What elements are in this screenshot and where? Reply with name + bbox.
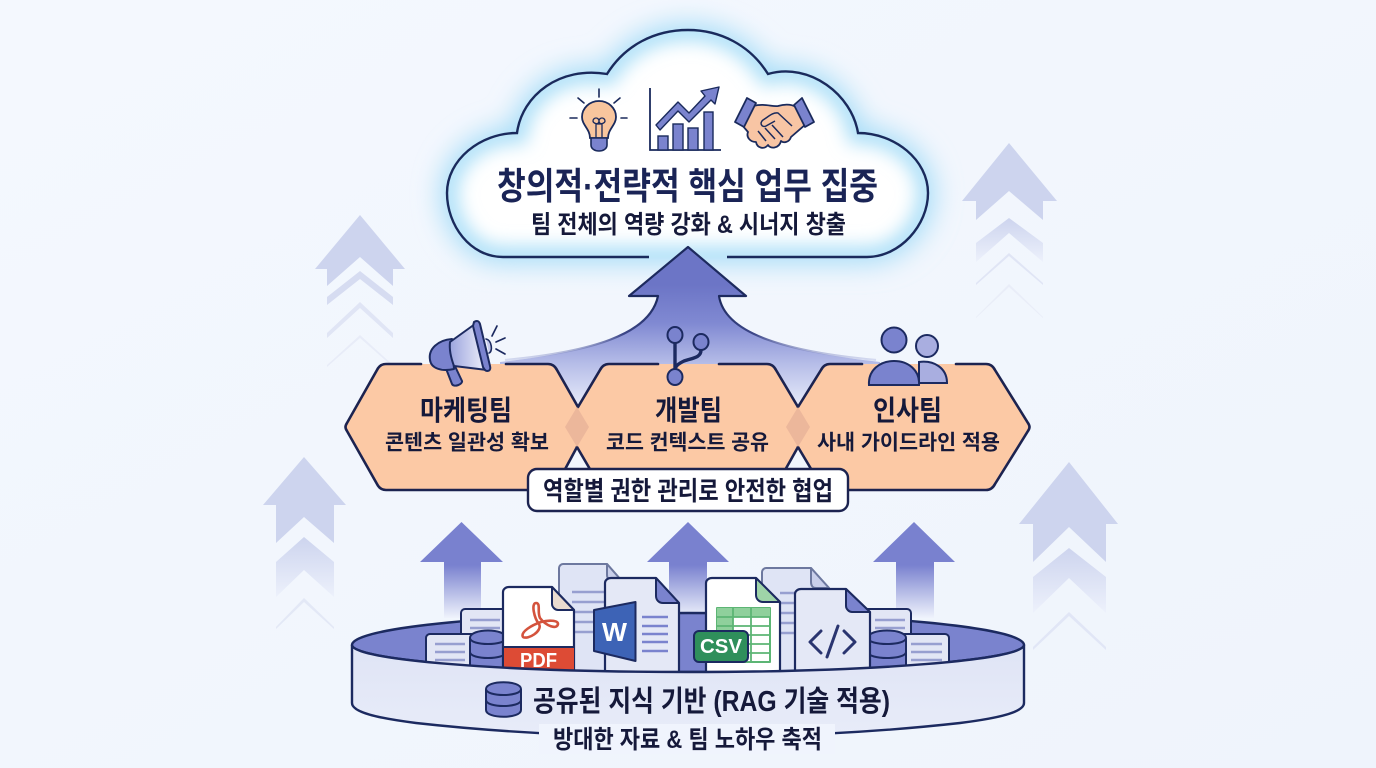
background arrow: lower right [1019,462,1118,650]
background arrow: lower left [263,457,346,629]
icon: handshake [735,98,814,148]
knowledge base platform [352,564,1024,754]
upward arrow: left [420,522,503,618]
icon: light bulb [570,89,627,151]
upward arrow: right [873,522,955,618]
document: Word [594,578,679,672]
callout: role permissions [528,469,848,511]
platform label background [539,724,835,754]
document: PDF: PDF [520,650,557,672]
central upward arrow [500,247,880,412]
cloud subheading: 팀 전체의 역량 강화 & 시너지 창출 [531,211,846,239]
platform front wall [352,645,1024,737]
document: code [795,589,870,672]
icon: code branch [668,327,708,385]
cloud heading: 창의적·전략적 핵심 업무 집중 [497,166,878,207]
marketing team label: 마케팅팀 [420,395,512,426]
document: CSV [694,578,780,672]
icon: growth chart [650,87,721,150]
marketing team label: 콘텐츠 일관성 확보 [385,432,549,454]
back documents [559,564,829,672]
platform subheading: 방대한 자료 & 팀 노하우 축적 [553,726,822,754]
document: CSV: CSV [700,636,743,658]
development team label: 개발팀 [655,395,722,426]
background arrow: upper right [962,143,1057,318]
icon: megaphone [430,321,505,386]
document: Word: W [602,617,627,647]
panel: development team hexagon [566,364,810,490]
panel: HR team hexagon [788,364,1030,490]
upward arrow: centre [647,522,729,618]
platform heading: 공유된 지식 기반 (RAG 기술 적용) [533,685,890,718]
marketing team label [385,395,549,454]
HR team label [817,395,1000,454]
development team label: 코드 컨텍스트 공유 [606,432,769,454]
icon: database [486,682,521,717]
HR team label: 사내 가이드라인 적용 [817,432,1000,454]
HR team label: 인사팀 [873,395,942,426]
platform top [352,613,1024,672]
cloud panel [447,30,928,257]
icon: people [869,328,947,385]
small document cards [426,609,949,670]
background arrow: upper left [315,215,405,367]
panel: marketing team hexagon [346,364,588,490]
overlap diamonds [565,407,810,447]
database cylinders [470,630,906,668]
callout: role permissions: 역할별 권한 관리로 안전한 협업 [543,476,833,506]
document: PDF [503,587,574,672]
development team label [606,395,769,454]
